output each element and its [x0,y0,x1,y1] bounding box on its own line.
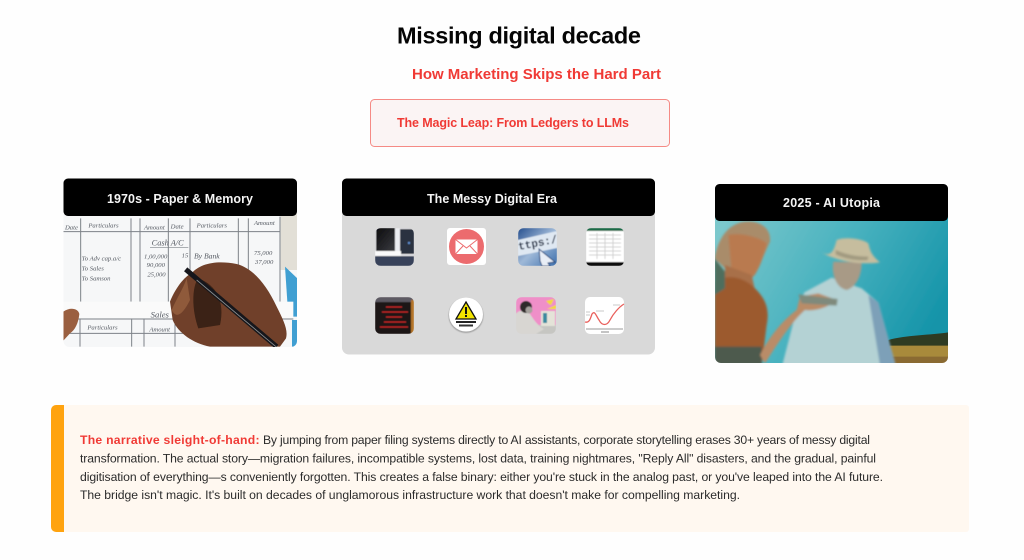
icon: red error screen [375,297,414,334]
photo: hand writing in a paper ledger: Amount [253,220,275,227]
callout body text: By jumping from paper filing systems directly to AI assistants, corporate storytelling erases 30+ years of messy digital [263,433,870,447]
photo: hand writing in a paper ledger: Particulars [87,222,119,229]
photo: hand writing in a paper ledger: Particulars [86,324,118,331]
callout: the magic leap: The Magic Leap: From Ledgers to LLMs [397,116,629,130]
callout: the narrative sleight-of-hand [51,405,969,532]
callout body text: The narrative sleight-of-hand: [80,433,260,447]
callout body text: digitisation of everything—s conveniently forgotten. This creates a false binary: either you're stuck in the analog past, or you've leaped into the AI future. [80,470,883,484]
icon: https browser address [518,228,557,266]
panel: 2025 AI utopia [715,184,948,365]
icon: person at vintage computer [516,297,556,334]
photo: hand writing in a paper ledger: To Adv cap.a/c [82,255,121,262]
icon: https browser address: ttps://w [517,232,572,254]
photo: two people looking at a phone under a blue sky [715,205,948,365]
header: 2025: 2025 - AI Utopia [783,196,881,210]
callout body text: transformation. The actual story—migration failures, incompatible systems, lost data, training nightmares, "Reply All" disasters, and the gradual, painful [80,452,876,466]
header: 2025 [715,184,948,221]
photo: hand writing in a paper ledger: To Sales [82,265,104,272]
icon: desktop computer [375,228,414,266]
photo: hand writing in a paper ledger: Cash A/C [152,239,184,248]
photo: hand writing in a paper ledger: 90,000 [147,262,166,269]
photo: hand writing in a paper ledger: Amount [143,224,165,231]
icon: spreadsheet [586,228,624,266]
callout body text [80,433,883,502]
callout: the magic leap [370,100,670,146]
header: 1970s [64,178,297,216]
photo: hand writing in a paper ledger: Sales [151,310,170,320]
photo: hand writing in a paper ledger: Amount [148,326,170,333]
accent bar [51,405,64,532]
photo: hand writing in a paper ledger: 75,000 [254,250,273,257]
photo: hand writing in a paper ledger: Date [170,224,184,231]
subtitle: How Marketing Skips the Hard Part [412,66,661,83]
photo: hand writing in a paper ledger: By Bank [194,252,220,261]
photo: hand writing in a paper ledger: To Samson [82,276,111,283]
icon: email envelope [447,228,486,265]
photo: hand writing in a paper ledger: Particulars [196,222,227,229]
photo: hand writing in a paper ledger: 37,000 [254,259,274,266]
photo: hand writing in a paper ledger: 15 [182,252,189,259]
icon: warning sign [448,298,484,333]
panel: the messy digital era [342,178,655,354]
panel: 1970s paper and memory [63,178,297,350]
header: messy digital era [342,178,655,216]
icon: line chart [585,297,624,334]
header: 1970s: 1970s - Paper & Memory [107,192,253,206]
photo: hand writing in a paper ledger [63,213,297,350]
photo: hand writing in a paper ledger: Date [64,224,78,231]
callout body text: The bridge isn't magic. It's built on decades of unglamorous infrastructure work that doesn't make for compelling marketing. [80,488,740,502]
title: Missing digital decade [397,22,641,48]
photo: hand writing in a paper ledger: 25,000 [147,272,166,279]
header: messy digital era: The Messy Digital Era [427,192,558,206]
photo: hand writing in a paper ledger: 1,00,000 [144,254,168,261]
